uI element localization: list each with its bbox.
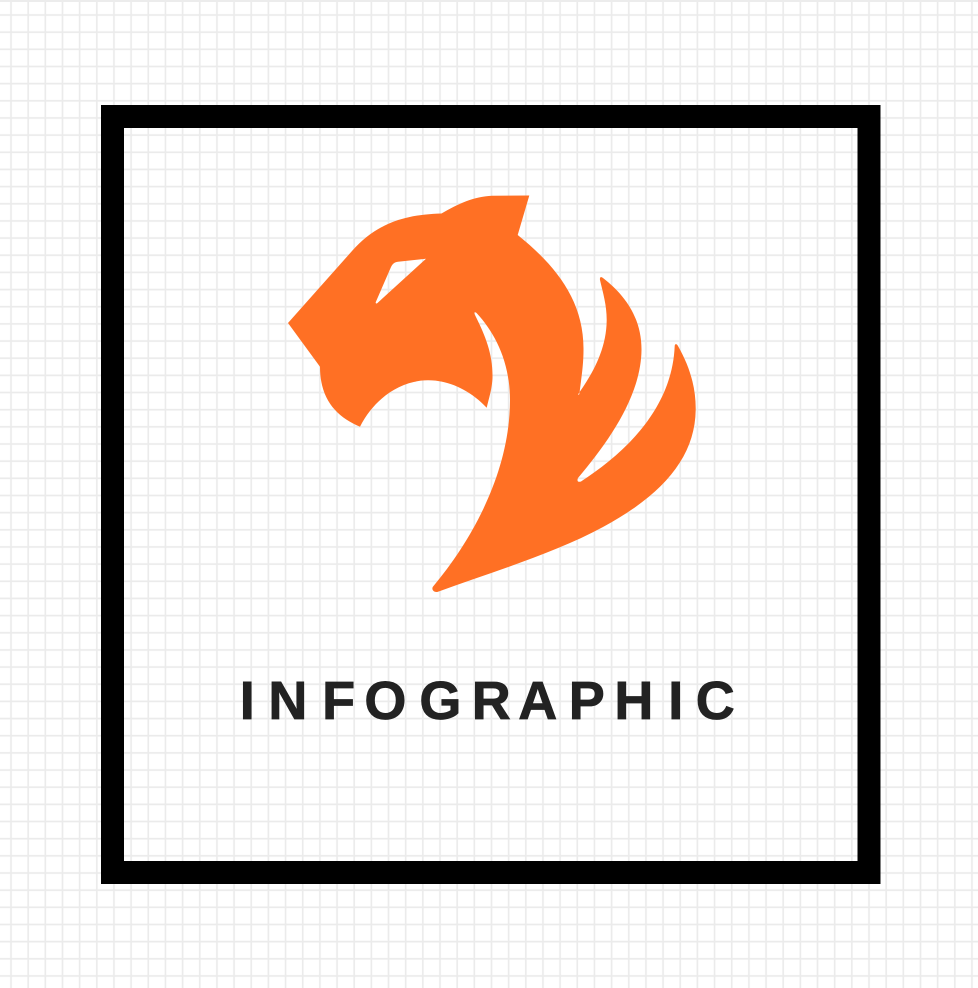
black square frame xyxy=(112,116,869,872)
title: INFOGRAPHIC: INFOGRAPHIC xyxy=(240,671,735,731)
icon: orange tiger head logo xyxy=(288,196,696,592)
